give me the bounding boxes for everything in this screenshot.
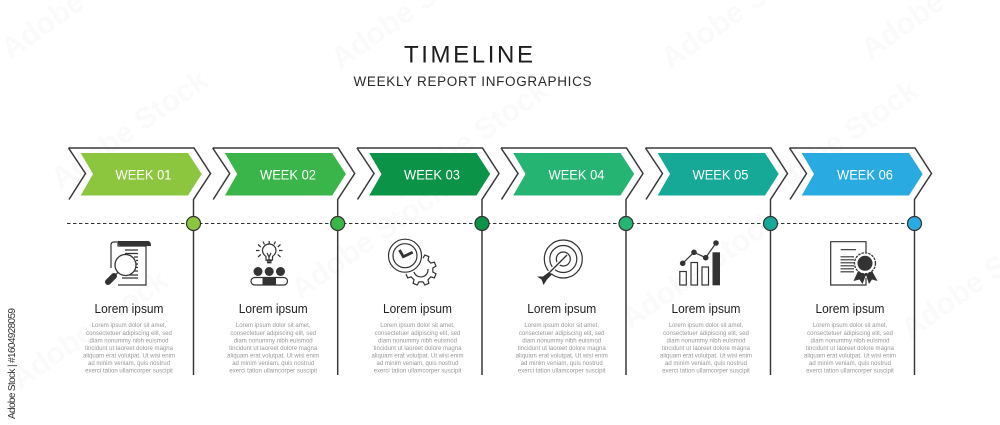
heading: Lorem ipsum [94, 301, 164, 316]
week 04 label: WEEK 04 [548, 166, 605, 182]
week 02 node [331, 216, 345, 230]
body text: Lorem ipsum dolor sit amet, [813, 323, 888, 329]
week 02 outline and stem [213, 148, 355, 375]
body text: consectetuer adipiscing elit, sed [519, 331, 605, 337]
body text: diam nonummy nibh euismod [522, 338, 601, 344]
panel: week 04 [501, 148, 643, 375]
week 02 arrow [225, 153, 346, 196]
body text: consectetuer adipiscing elit, sed [663, 331, 749, 337]
heading: Lorem ipsum [239, 301, 308, 316]
body text: diam nonummy nibh euismod [378, 338, 457, 344]
week 06 outline and stem [790, 148, 932, 375]
body text [83, 323, 175, 374]
body text: aliquam erat volutpat. Ut wisi enim [660, 354, 752, 360]
body text: tincidunt ut laoreet dolore magna [806, 346, 895, 352]
body text: ad minim veniam, quis nostrud [665, 361, 747, 367]
title: TIMELINE [404, 42, 533, 68]
heading: Lorem ipsum [672, 301, 740, 316]
body text: ad minim veniam, quis nostrud [521, 361, 603, 367]
heading: Lorem ipsum [527, 301, 596, 316]
body text [516, 323, 608, 374]
body text: Lorem ipsum dolor sit amet, [524, 323, 599, 329]
body text: exerci tation ullamcorper suscipit [229, 368, 317, 374]
body text: ad minim veniam, quis nostrud [809, 361, 891, 367]
body text: diam nonummy nibh euismod [90, 338, 168, 344]
body text: exerci tation ullamcorper suscipit [806, 368, 894, 374]
text: Adobe Stock [615, 203, 784, 336]
body text: exerci tation ullamcorper suscipit [85, 368, 173, 374]
body text: aliquam erat volutpat. Ut wisi enim [371, 354, 464, 360]
body text: exerci tation ullamcorper suscipit [662, 368, 750, 374]
body text [804, 323, 896, 374]
body text: Lorem ipsum dolor sit amet, [669, 323, 744, 329]
stock image id label: Adobe Stock | #1604928059 [7, 308, 18, 419]
week 04 outline and stem [501, 148, 643, 375]
body text: tincidunt ut laoreet dolore magna [518, 346, 606, 352]
week 05 outline and stem [646, 148, 788, 375]
text: Adobe Stock [5, 263, 174, 396]
week 01 arrow [81, 153, 202, 196]
body text: aliquam erat volutpat. Ut wisi enim [804, 354, 896, 360]
panel: week 02 [213, 148, 355, 375]
body text: tincidunt ut laoreet dolore magna [85, 346, 174, 352]
body text: tincidunt ut laoreet dolore magna [662, 346, 751, 352]
week 05 arrow [658, 153, 779, 196]
week 06 label: WEEK 06 [837, 166, 893, 182]
week 05 label: WEEK 05 [692, 166, 749, 182]
week 05 node [764, 216, 778, 230]
week 03 arrow [369, 153, 490, 196]
body text: diam nonummy nibh euismod [810, 338, 890, 344]
body text: consectetuer adipiscing elit, sed [375, 331, 460, 337]
week 06 node [908, 216, 922, 230]
body text: aliquam erat volutpat. Ut wisi enim [83, 354, 175, 360]
body text: aliquam erat volutpat. Ut wisi enim [227, 354, 319, 360]
body text: ad minim veniam, quis nostrud [232, 361, 314, 367]
body text: diam nonummy nibh euismod [234, 338, 313, 344]
heading: Lorem ipsum [383, 301, 452, 316]
panel: week 05 [646, 148, 788, 375]
panel: week 01 [68, 148, 210, 375]
week 04 node [619, 216, 633, 230]
body text: tincidunt ut laoreet dolore magna [373, 346, 462, 352]
body text: tincidunt ut laoreet dolore magna [229, 346, 318, 352]
body text [227, 323, 319, 374]
week 02 label: WEEK 02 [260, 166, 316, 182]
week 06 arrow [802, 153, 923, 196]
icon: idea and team [251, 241, 288, 286]
week 03 label: WEEK 03 [404, 166, 460, 182]
body text [371, 323, 464, 374]
icon: clock and gear [388, 239, 436, 285]
body text: exerci tation ullamcorper suscipit [374, 368, 462, 374]
body text: aliquam erat volutpat. Ut wisi enim [516, 354, 608, 360]
text: Adobe Stock [285, 173, 454, 306]
body text: ad minim veniam, quis nostrud [376, 361, 459, 367]
icon: document with magnifier [108, 241, 151, 285]
body text: ad minim veniam, quis nostrud [88, 361, 170, 367]
text: Adobe Stock [45, 63, 214, 196]
week 01 label: WEEK 01 [116, 166, 172, 182]
body text: consectetuer adipiscing elit, sed [807, 331, 893, 337]
week 01 node [186, 216, 200, 230]
week 03 node [475, 216, 489, 230]
week 01 outline and stem [68, 148, 210, 375]
body text: diam nonummy nibh euismod [666, 338, 746, 344]
week 03 outline and stem [357, 148, 499, 375]
body text: Lorem ipsum dolor sit amet, [380, 323, 455, 329]
body text: Lorem ipsum dolor sit amet, [92, 323, 167, 329]
text: Adobe Stock [385, 73, 554, 206]
panel: week 03 [357, 148, 499, 375]
icon: bar chart with trend line [680, 240, 720, 285]
body text: consectetuer adipiscing elit, sed [230, 331, 316, 337]
week 04 arrow [513, 153, 634, 196]
icon: certificate with seal [831, 242, 878, 285]
text: Adobe Stock [755, 73, 924, 206]
heading: Lorem ipsum [816, 301, 884, 316]
icon: target with arrow [537, 240, 582, 285]
body text: consectetuer adipiscing elit, sed [86, 331, 172, 337]
body text [660, 323, 752, 374]
subtitle: WEEKLY REPORT INFOGRAPHICS [354, 74, 592, 89]
body text: exerci tation ullamcorper suscipit [518, 368, 606, 374]
panel: week 06 [790, 148, 932, 375]
body text: Lorem ipsum dolor sit amet, [236, 323, 311, 329]
dashed timeline axis [67, 222, 915, 224]
